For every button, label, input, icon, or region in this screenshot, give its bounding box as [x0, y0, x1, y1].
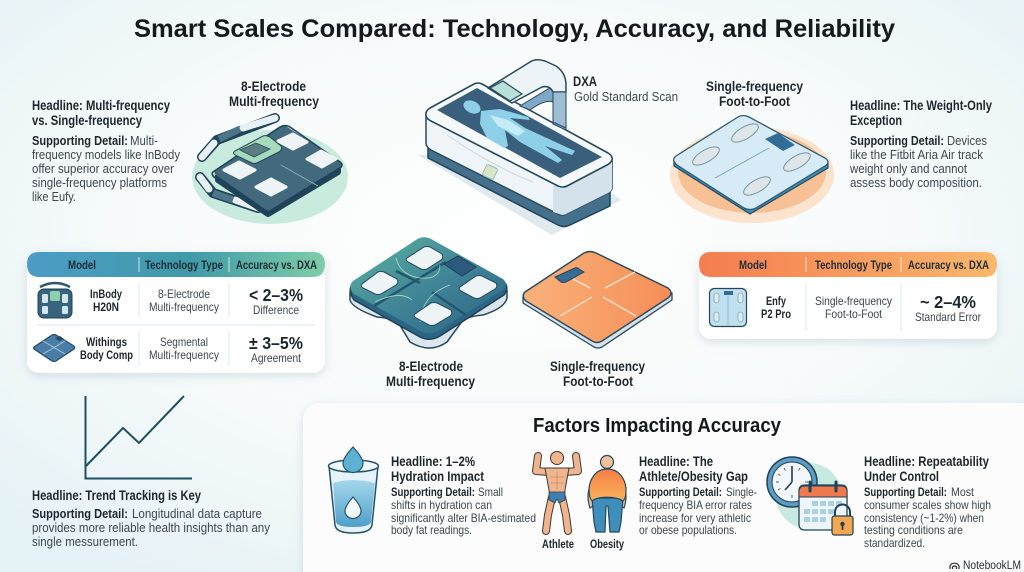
label: 8-electrode top: Multi-frequency	[229, 94, 319, 109]
row: Withings Body Comp: Withings	[86, 335, 127, 349]
label: 8-electrode top: 8-Electrode	[241, 79, 306, 94]
row: Withings Body Comp: ± 3–5%	[249, 333, 303, 353]
row: Withings Body Comp: Body Comp	[80, 348, 133, 362]
text block: multi-frequency vs single-frequency: Multi-	[130, 133, 158, 148]
table header: Accuracy vs. DXA	[908, 258, 989, 272]
row: InBody H20N: 8-Electrode	[158, 287, 210, 301]
icon: water glass	[328, 447, 378, 533]
text block: athlete/obesity gap: Supporting Detail:	[639, 485, 722, 499]
text block: trend tracking: Headline: Trend Tracking is Key	[32, 488, 201, 503]
text block: athlete/obesity gap: Headline: The	[639, 454, 713, 469]
icon: 8-electrode scale with handles	[192, 118, 348, 224]
text block: weight-only exception: Headline: The Weight-Only	[850, 98, 992, 113]
text block: weight-only exception: weight only and cannot	[849, 161, 967, 176]
text block: repeatability: Most	[951, 485, 975, 499]
text block: athlete/obesity gap: or obese populations.	[639, 523, 737, 537]
text block: athlete/obesity gap: Single-	[726, 485, 757, 499]
table header: Model	[68, 258, 96, 272]
text block: athlete/obesity gap	[639, 454, 757, 537]
row: Enfy P2 Pro: P2 Pro	[761, 307, 791, 321]
icon: center orange scale	[523, 252, 672, 348]
row: Enfy P2 Pro	[761, 292, 981, 324]
row: Withings Body Comp: Agreement	[251, 351, 302, 365]
text block: repeatability: standardized.	[864, 536, 925, 550]
text block: weight-only exception: assess body composition.	[850, 175, 982, 190]
table header	[739, 258, 989, 272]
label: 8-electrode top	[229, 79, 319, 109]
text block: athlete/obesity gap: increase for very athletic	[639, 511, 751, 525]
text block: repeatability	[864, 454, 991, 550]
text block: hydration	[391, 454, 536, 537]
label: single-frequency top: Foot-to-Foot	[719, 94, 790, 109]
text block: weight-only exception: like the Fitbit Aria Air track	[850, 147, 983, 162]
label: center single-frequency: Foot-to-Foot	[563, 374, 633, 389]
row: Enfy P2 Pro: Standard Error	[915, 310, 981, 324]
text block: trend tracking: Longitudinal data capture	[132, 506, 262, 521]
row: InBody H20N: < 2–3%	[249, 285, 303, 305]
panel: factors impacting accuracy	[303, 403, 1024, 572]
text block: multi-frequency vs single-frequency: frequency models like InBody	[32, 147, 180, 162]
row: Enfy P2 Pro: Foot-to-Foot	[825, 307, 883, 321]
row: Withings Body Comp: Segmental	[160, 335, 208, 349]
text block: weight-only exception: Exception	[850, 113, 902, 128]
text block: repeatability: consistency (~1-2%) when	[864, 511, 984, 525]
label: athlete and obesity: Athlete	[542, 537, 574, 551]
row: InBody H20N: Difference	[253, 303, 299, 317]
heading: factors: Factors Impacting Accuracy	[533, 415, 782, 437]
icon: center 8-electrode scale	[350, 237, 507, 348]
label: DXA	[573, 74, 678, 104]
text block: hydration: body fat readings.	[391, 523, 472, 537]
label: center single-frequency	[550, 359, 645, 389]
text block: repeatability: Under Control	[864, 469, 939, 484]
row: InBody H20N: H20N	[93, 300, 119, 314]
text block: trend tracking	[32, 488, 270, 549]
row: InBody H20N: Multi-frequency	[149, 300, 219, 314]
label: center single-frequency: Single-frequency	[550, 359, 645, 374]
row: Enfy P2 Pro: ~ 2–4%	[920, 292, 976, 312]
text block: repeatability: Supporting Detail:	[864, 485, 947, 499]
table header	[68, 258, 317, 272]
text block: trend tracking: single messurement.	[32, 534, 138, 549]
text block: hydration: shifts in hydration can	[391, 498, 492, 512]
text block: hydration: Hydration Impact	[391, 469, 484, 484]
icon: InBody H20N	[38, 283, 72, 318]
icon: Enfy P2 Pro	[710, 288, 746, 326]
text block: trend tracking: Supporting Detail:	[32, 506, 128, 521]
text block: repeatability: testing conditions are	[864, 523, 963, 537]
text block: multi-frequency vs single-frequency: Supporting Detail:	[32, 133, 128, 148]
panel: multi-frequency comparison table	[27, 252, 325, 373]
text block: multi-frequency vs single-frequency: like Eufy.	[32, 189, 76, 204]
text block: trend tracking: provides more reliable health insights than any	[32, 520, 270, 535]
icon: Withings Body Comp	[34, 334, 74, 362]
row: Enfy P2 Pro: Single-frequency	[815, 294, 892, 308]
text block: weight-only exception: Supporting Detail:	[850, 133, 944, 148]
icon: obese figure	[588, 456, 626, 532]
label: athlete and obesity: Obesity	[590, 537, 624, 551]
text block: multi-frequency vs single-frequency: Headline: Multi-frequency	[32, 98, 170, 113]
icon: DXA scanner	[418, 60, 621, 235]
text block: multi-frequency vs single-frequency	[32, 98, 180, 204]
text block: repeatability: consumer scales show high	[864, 498, 991, 512]
label: center 8-electrode	[386, 359, 475, 389]
text block: weight-only exception: Devices	[947, 133, 987, 148]
text block: hydration: Headline: 1–2%	[391, 454, 475, 469]
table header: Technology Type	[145, 258, 223, 272]
icon: single-frequency scale	[670, 116, 834, 223]
row: Withings Body Comp: Multi-frequency	[149, 348, 219, 362]
text block: athlete/obesity gap: Athlete/Obesity Gap	[639, 469, 748, 484]
text block: multi-frequency vs single-frequency: single-frequency platforms	[32, 175, 167, 190]
label: single-frequency top	[706, 79, 803, 109]
table header: Model	[739, 258, 767, 272]
text block: weight-only exception	[849, 98, 992, 190]
label: center 8-electrode: Multi-frequency	[386, 374, 475, 389]
label: single-frequency top: Single-frequency	[706, 79, 803, 94]
text block: multi-frequency vs single-frequency: vs. Single-frequency	[32, 113, 142, 128]
row: InBody H20N: InBody	[90, 287, 122, 301]
text block: hydration: Supporting Detail:	[391, 485, 475, 499]
table header: Technology Type	[815, 258, 892, 272]
label: DXA: DXA	[573, 74, 597, 89]
icon: athlete	[536, 452, 578, 531]
row: Withings Body Comp	[80, 333, 303, 365]
label: center 8-electrode: 8-Electrode	[399, 359, 463, 374]
icon: clock calendar lock	[767, 457, 853, 535]
text block: hydration: significantly alter BIA-estimated	[391, 511, 536, 525]
panel: single-frequency comparison table	[699, 252, 997, 339]
text block: hydration: Small	[478, 485, 503, 499]
title: Smart Scales Compared: Technology, Accuracy, and Reliability	[134, 15, 895, 43]
label: DXA: Gold Standard Scan	[574, 89, 678, 104]
text block: athlete/obesity gap: frequency BIA error rates	[639, 498, 752, 512]
label: athlete and obesity	[542, 537, 624, 551]
row: Enfy P2 Pro: Enfy	[766, 294, 786, 308]
table header: Accuracy vs. DXA	[236, 258, 317, 272]
text block: multi-frequency vs single-frequency: offer superior accuracy over	[32, 161, 175, 176]
text block: repeatability: Headline: Repeatability	[864, 454, 989, 469]
row: InBody H20N	[90, 285, 303, 317]
chart: trend line	[86, 396, 192, 478]
